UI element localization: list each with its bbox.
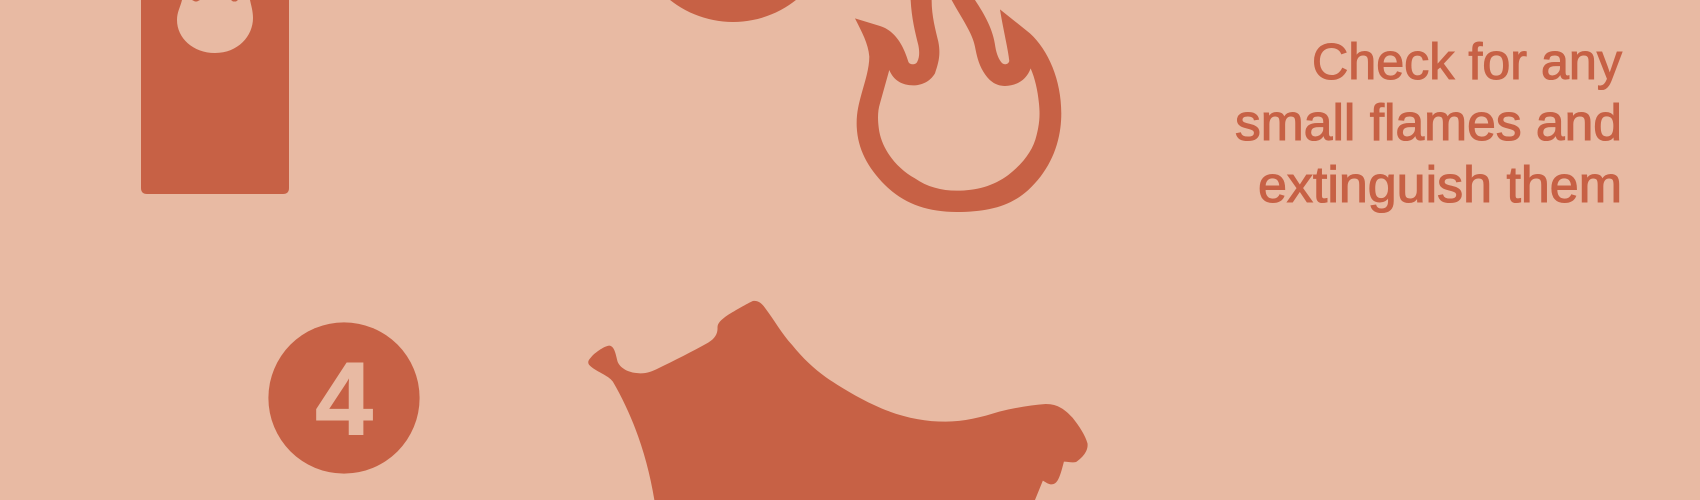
text block: step 3 caption: extinguish them bbox=[1258, 156, 1622, 213]
text block: step 3 caption: Check for any bbox=[1312, 33, 1622, 90]
text block: step 3 caption bbox=[1235, 33, 1622, 213]
step number badge: 4 bbox=[268, 322, 420, 474]
icon: door hanger bbox=[141, 0, 289, 194]
step number badge: 4: 4 bbox=[315, 342, 373, 458]
icon: flame outline bbox=[855, 0, 1061, 212]
text block: step 3 caption: small flames and bbox=[1235, 94, 1622, 151]
icon: circle fragment bbox=[632, 0, 834, 22]
icon: large blob shape, step 4 illustration bbox=[588, 301, 1088, 500]
